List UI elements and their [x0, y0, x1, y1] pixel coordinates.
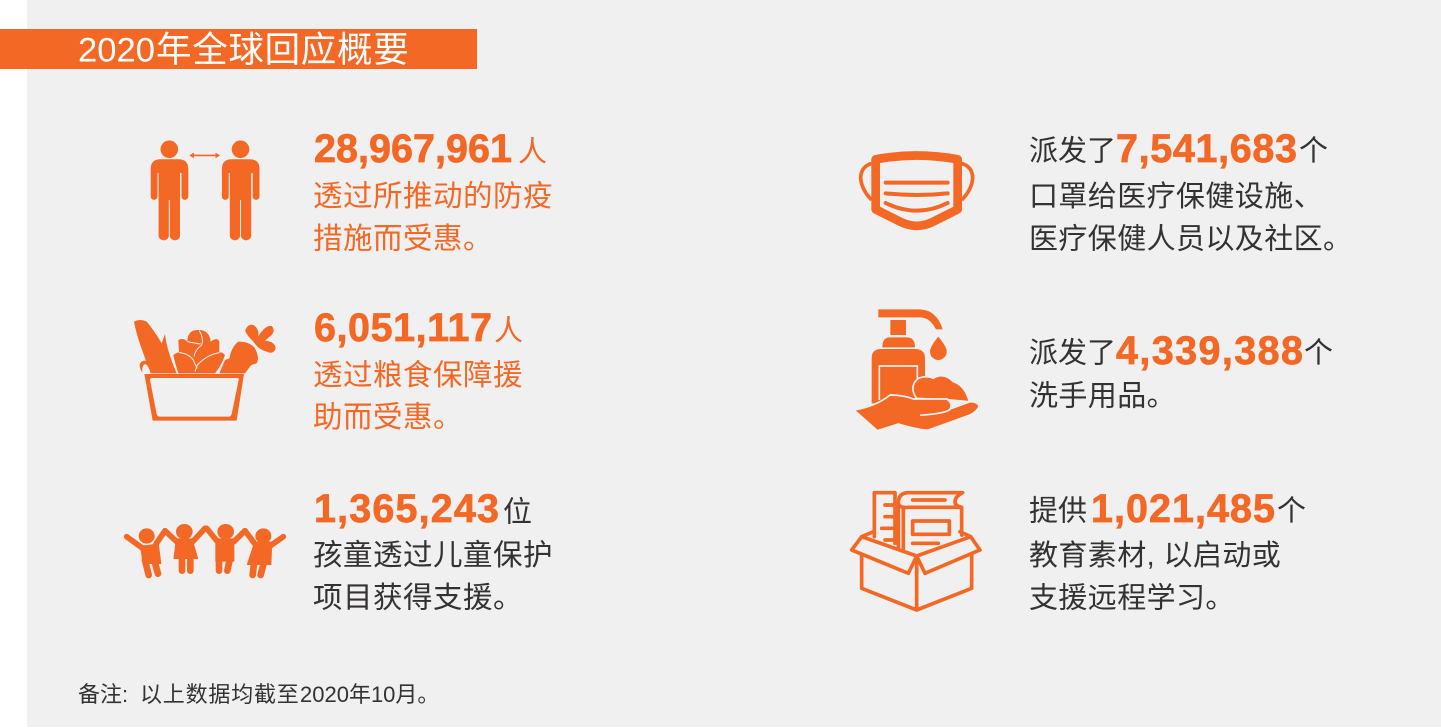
- text: 7,541,683 masks: 个: [1299, 136, 1328, 168]
- icon: two people with distance arrow: [151, 140, 260, 240]
- text: 1,021,485 materials: 个: [1277, 496, 1306, 528]
- text: 6,051,117 people: [313, 306, 523, 434]
- text: 4,339,388 hygiene items: 派发了: [1029, 336, 1116, 370]
- text: 6,051,117 people: 6,051,117: [314, 306, 492, 350]
- text: 28,967,961 people: [313, 127, 553, 256]
- icon: face mask: [861, 155, 973, 226]
- title banner: 2020: [78, 32, 155, 70]
- text: 1,365,243 children: 孩童透过儿童保护: [313, 539, 553, 572]
- text: 6,051,117 people: 助而受惠。: [313, 401, 463, 434]
- text: 4,339,388 hygiene items: 4,339,388: [1116, 329, 1303, 373]
- text: 4,339,388 hygiene items: [1029, 329, 1333, 412]
- panel: food security: [134, 306, 523, 434]
- text: 7,541,683 masks: 7,541,683: [1116, 127, 1297, 171]
- panel: physical distancing: [151, 127, 553, 256]
- text: 6,051,117 people: 人: [494, 316, 523, 348]
- title banner: 年全球回应概要: [156, 30, 409, 70]
- icon: food basket: [134, 320, 276, 421]
- text: 1,021,485 materials: 提供: [1029, 494, 1087, 528]
- text: 1,021,485 materials: 教育素材, 以启动或: [1029, 539, 1281, 572]
- icon: children holding hands: [127, 524, 283, 575]
- text: 1,021,485 materials: [1029, 487, 1306, 614]
- text: 1,021,485 materials: 1,021,485: [1091, 487, 1275, 531]
- text: 6,051,117 people: 透过粮食保障援: [313, 359, 523, 392]
- text: 28,967,961 people: 人: [518, 136, 547, 168]
- icon: soap pump and hand: [854, 309, 979, 431]
- text: 1,021,485 materials: 支援远程学习。: [1029, 582, 1235, 614]
- text: 1,365,243 children: 位: [503, 496, 532, 528]
- text: 4,339,388 hygiene items: 洗手用品。: [1029, 380, 1176, 412]
- text: 1,365,243 children: 项目获得支援。: [313, 582, 523, 614]
- text: 28,967,961 people: 措施而受惠。: [313, 222, 493, 256]
- footnote: 备注:: [78, 682, 128, 707]
- panel: masks: [861, 127, 1352, 256]
- panel: education materials: [852, 487, 1306, 614]
- text: 7,541,683 masks: 派发了: [1029, 134, 1116, 168]
- text: 1,365,243 children: 1,365,243: [314, 487, 499, 531]
- text: 28,967,961 people: 28,967,961: [314, 127, 512, 171]
- icon: box of books: [852, 493, 980, 610]
- footnote: 以上数据均截至: [140, 682, 300, 707]
- text: 1,365,243 children: [313, 487, 553, 614]
- panel: handwashing: [854, 309, 1333, 431]
- panel: child protection: [127, 487, 553, 614]
- text: 7,541,683 masks: 口罩给医疗保健设施、: [1029, 180, 1323, 213]
- footnote: 2020年10月。: [300, 682, 439, 707]
- text: 4,339,388 hygiene items: 个: [1304, 338, 1333, 370]
- text: 7,541,683 masks: [1029, 127, 1352, 256]
- text: 28,967,961 people: 透过所推动的防疫: [313, 180, 553, 213]
- text: 7,541,683 masks: 医疗保健人员以及社区。: [1029, 222, 1352, 256]
- title banner: [0, 29, 477, 70]
